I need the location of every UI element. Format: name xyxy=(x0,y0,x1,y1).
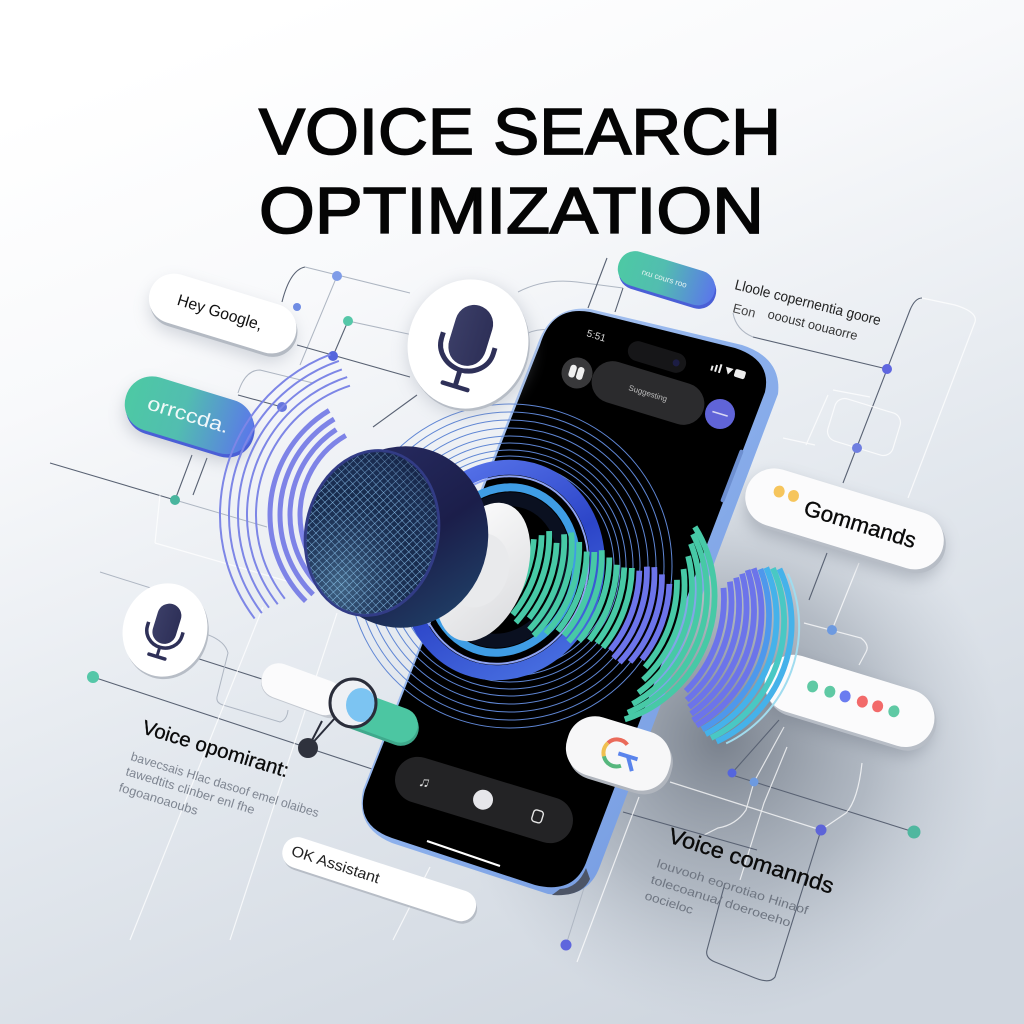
panel: Gommands pill: Gommands xyxy=(801,495,919,553)
connector dots xyxy=(87,271,920,950)
icon: yellow dots xyxy=(772,484,801,503)
icon: status dots xyxy=(806,679,901,719)
text block: top right: Lloole copernentia goore xyxy=(733,277,882,329)
label pill: green gradient: orrccda. xyxy=(145,393,231,438)
sound rings on screen xyxy=(306,362,714,770)
label pill: Hey Google xyxy=(140,267,305,369)
app icon button xyxy=(558,354,596,392)
mic mesh xyxy=(290,438,454,628)
voice prompt pill: Suggesting xyxy=(627,383,668,404)
status time: 5:51 xyxy=(585,328,607,345)
label pill: OK Assistant: OK Assistant xyxy=(289,843,383,888)
icon: bookmark xyxy=(531,809,544,824)
phone body xyxy=(362,309,778,895)
sound wave left xyxy=(151,274,633,756)
label pill: top green: rxu cours roo xyxy=(641,268,688,290)
text block: voice commands: louvooh eoorotiao Hinaof xyxy=(655,857,811,918)
icon: large microphone badge xyxy=(390,264,549,430)
bottom nav pill xyxy=(389,751,579,849)
label pill: Hey Google: Hey Google, xyxy=(175,292,264,334)
label pill: top green xyxy=(613,247,721,313)
sound wave right xyxy=(230,361,836,793)
icon: small microphone badge xyxy=(111,573,221,690)
icon: note: ♫ xyxy=(417,773,432,792)
search slider widget xyxy=(256,658,425,758)
panel: coloured dots pill xyxy=(755,648,945,764)
blue ring xyxy=(380,440,626,700)
text block: voice commands: tolecoanua/ doeroeeho xyxy=(649,873,793,930)
slider track xyxy=(256,658,425,751)
text block: voice optimization: Voice opomirant: xyxy=(140,717,291,782)
panel: Google pill xyxy=(558,709,681,801)
mic body xyxy=(301,430,505,644)
icon: G logo xyxy=(600,736,641,772)
text block: top right: Eon xyxy=(731,300,757,321)
magnifier knob xyxy=(298,738,318,758)
text block: voice commands xyxy=(643,823,837,930)
title: OPTIMIZATION xyxy=(259,174,764,247)
status icons xyxy=(710,362,746,380)
text block: top right: oooust oouaorre xyxy=(766,306,859,343)
text block: voice optimization: bavecsais Hlac dasoof emel olaibes xyxy=(129,749,321,820)
label pill: OK Assistant xyxy=(278,833,482,928)
text block: voice commands: Voice comannds xyxy=(665,823,837,898)
earbud tip xyxy=(418,490,548,654)
text block: voice optimization: tawedtits clinber enl fhe xyxy=(124,764,256,817)
voice prompt pill xyxy=(586,356,710,430)
purple action button xyxy=(705,399,735,429)
phone xyxy=(362,309,778,895)
side button xyxy=(720,449,744,503)
text block: voice optimization xyxy=(117,717,321,820)
text block: voice commands: oocieloc xyxy=(643,889,695,917)
dynamic island xyxy=(625,339,689,375)
label pill: green gradient xyxy=(116,370,262,469)
panel: Gommands pill xyxy=(735,461,954,586)
connector lines xyxy=(50,258,975,981)
microphone head xyxy=(290,430,505,644)
text block: voice optimization: fogoanoaoubs xyxy=(117,780,200,818)
home indicator xyxy=(427,841,500,866)
magnifier lens xyxy=(330,679,376,727)
phone screen xyxy=(363,311,766,887)
title: VOICE SEARCH xyxy=(259,95,781,168)
title xyxy=(259,95,781,247)
